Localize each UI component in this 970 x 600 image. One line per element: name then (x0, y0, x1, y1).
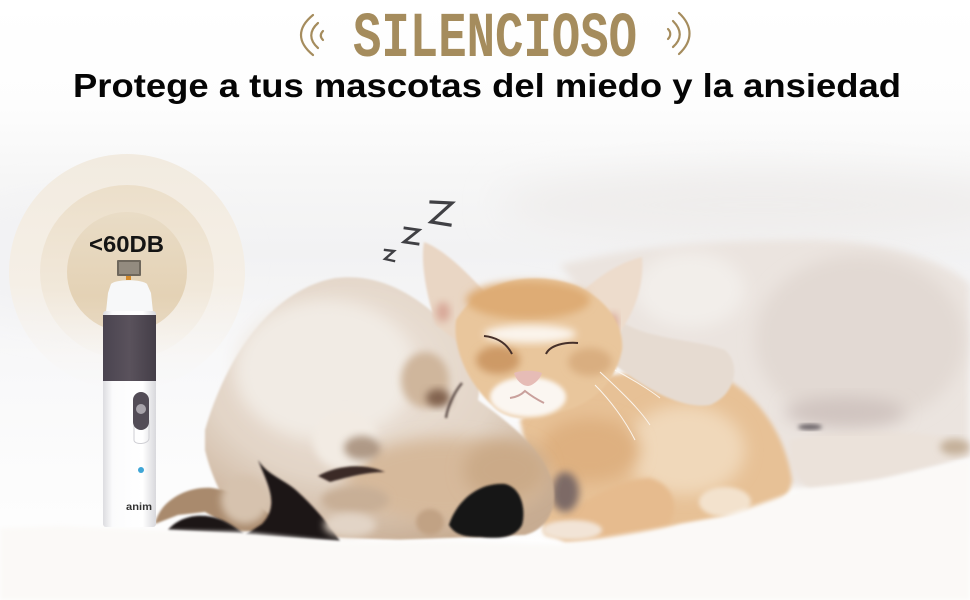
background dog body (560, 240, 970, 488)
sound rings (9, 154, 245, 390)
icon: sleeping Z letters (385, 202, 452, 261)
icon: sound waves right (668, 13, 690, 54)
kitten eyes (484, 336, 578, 354)
puppy (155, 277, 554, 541)
dog ear behind kitten (615, 322, 734, 406)
puppy head (205, 277, 554, 540)
grinder bit (117, 260, 141, 276)
puppy dark neck (245, 460, 340, 541)
icon: sound waves left (301, 15, 323, 55)
subtitle: Protege a tus mascotas del miedo y la ansiedad (73, 67, 901, 104)
kitten body (520, 370, 792, 542)
switch (133, 392, 149, 444)
product: nail grinder (103, 260, 156, 527)
kitten ears (423, 242, 490, 345)
label: noise level: <60DB (89, 231, 164, 257)
kitten whiskers (595, 370, 660, 440)
puppy nose (449, 484, 523, 538)
puppy eye (318, 466, 385, 482)
kitten head (423, 242, 660, 440)
grinder body (103, 311, 156, 527)
indicator light (138, 467, 144, 473)
title: SILENCIOSO (353, 2, 637, 75)
grinder dark band (103, 315, 156, 381)
carpet foreground (0, 460, 970, 600)
kitten nose and mouth (514, 371, 542, 386)
kitten face (455, 278, 622, 418)
grinder cap (106, 280, 153, 312)
puppy paw (401, 352, 449, 408)
puppy ear (155, 488, 280, 532)
brand logo: anim (126, 502, 152, 513)
puppy ear shadow (168, 516, 244, 534)
